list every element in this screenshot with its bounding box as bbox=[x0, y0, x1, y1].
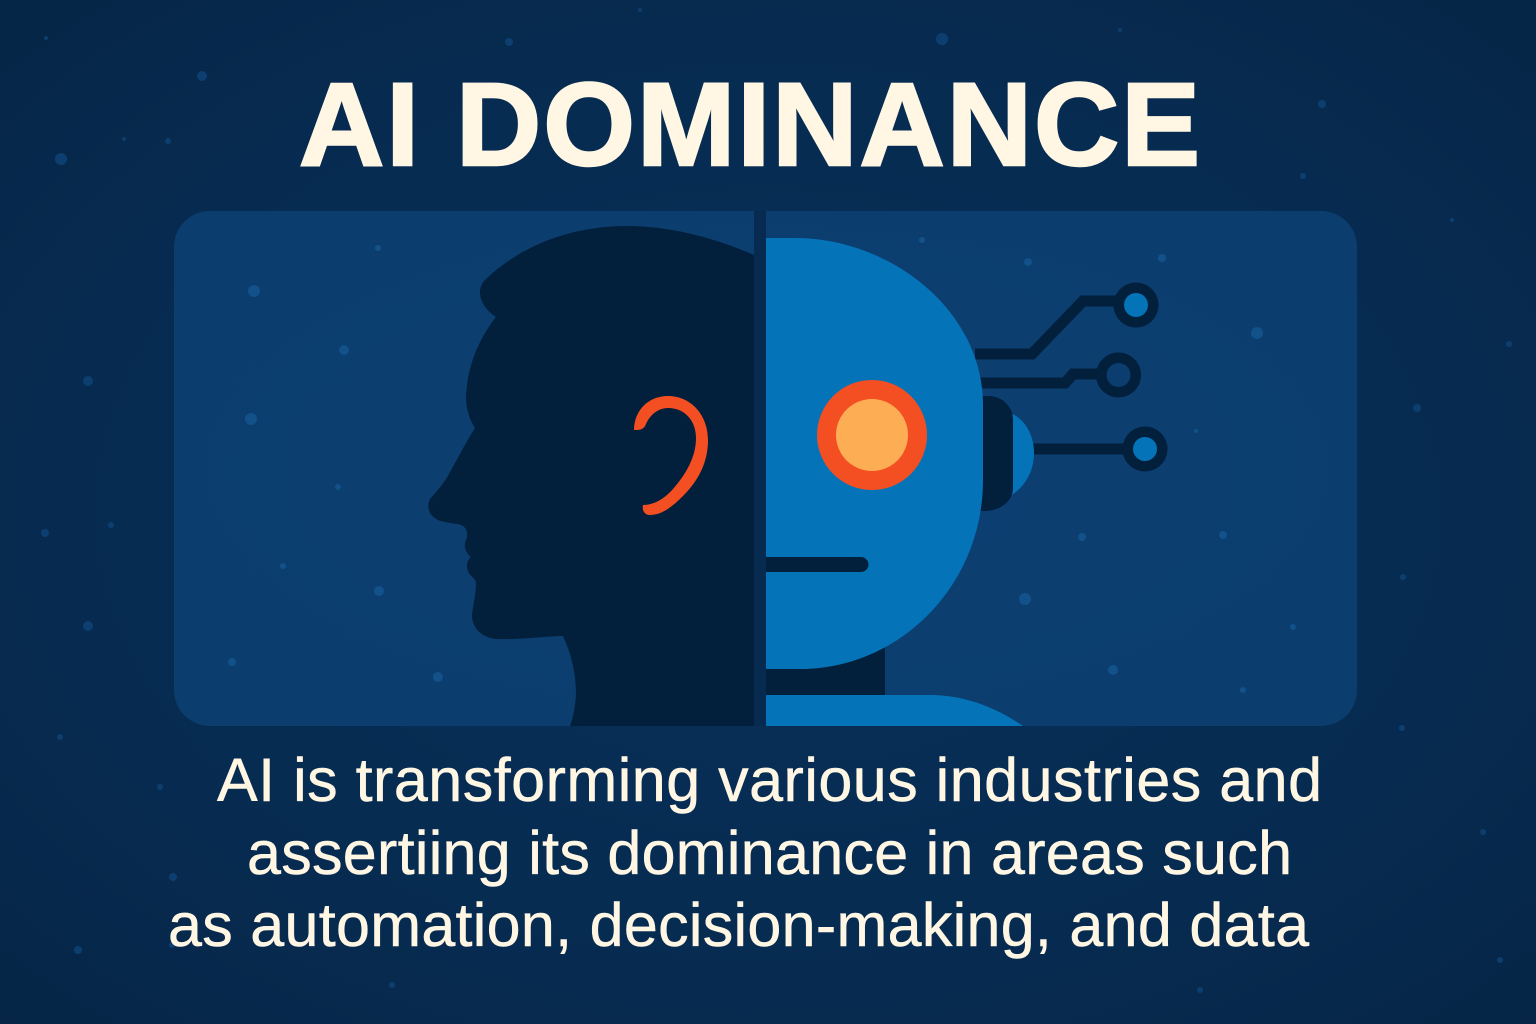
human ear bbox=[634, 396, 708, 515]
robot mouth bbox=[766, 557, 868, 572]
robot neck bbox=[766, 640, 885, 695]
title: AI DOMINANCE bbox=[299, 59, 1200, 191]
panel: illustration background bbox=[174, 211, 1357, 726]
robot eye bbox=[817, 380, 927, 490]
circuit node middle bbox=[1096, 352, 1141, 398]
circuit node top bbox=[1114, 282, 1158, 328]
human head silhouette bbox=[428, 226, 754, 726]
description text: AI is transforming various industries and bbox=[217, 746, 1322, 814]
robot ear bbox=[978, 396, 1034, 511]
centre divider bbox=[754, 211, 766, 726]
robot head bbox=[766, 238, 983, 669]
circuit node bottom bbox=[1122, 426, 1168, 472]
robot shoulders bbox=[766, 695, 1023, 726]
description text bbox=[168, 746, 1322, 959]
description text: as automation, decision-making, and data bbox=[168, 891, 1309, 959]
circuit lines bbox=[975, 301, 1125, 449]
description text: assertiing its dominance in areas such bbox=[247, 819, 1292, 887]
